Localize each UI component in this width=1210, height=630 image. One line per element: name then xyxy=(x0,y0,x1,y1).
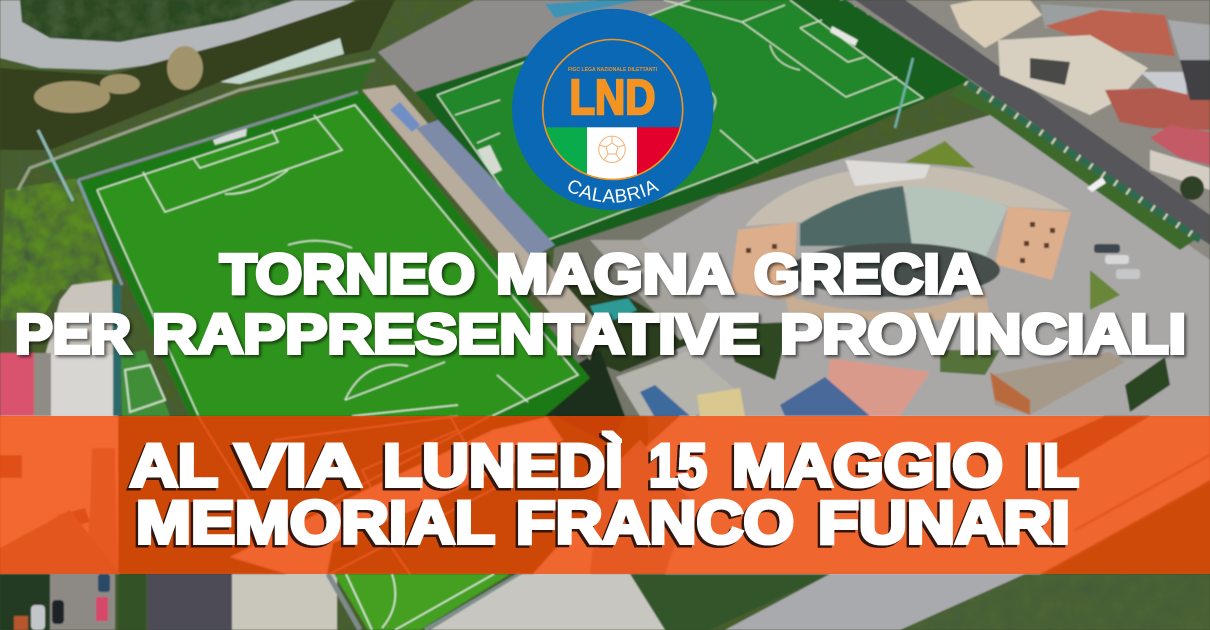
band line 2: FUNARI xyxy=(818,489,1070,556)
fence: posts xyxy=(840,0,1200,240)
playing surface xyxy=(97,105,578,416)
office: left tower xyxy=(730,222,797,300)
logo: LND Calabria xyxy=(512,8,714,210)
court: frame xyxy=(125,365,165,412)
road: top-left curve xyxy=(0,0,355,70)
banner: painted wall xyxy=(220,38,344,84)
band line 1: 15 xyxy=(649,432,707,499)
wall: speckled xyxy=(34,353,51,417)
strip: teal xyxy=(113,285,121,420)
band headline xyxy=(130,432,1079,556)
title xyxy=(15,242,1186,365)
buildings: top-right block xyxy=(950,0,1210,200)
fence xyxy=(328,574,360,630)
teal roof xyxy=(590,298,637,326)
band line 1: IL xyxy=(1026,432,1079,499)
band line 2: MEMORIAL xyxy=(136,489,494,556)
turf xyxy=(415,0,970,250)
vegetation mid xyxy=(630,574,830,630)
left buildings xyxy=(0,280,170,420)
building: lower right xyxy=(990,352,1125,415)
building under band xyxy=(533,416,1210,574)
dark planting xyxy=(555,280,700,372)
parking: top centre xyxy=(378,0,700,92)
cars xyxy=(14,616,28,630)
title line 2: PROVINCIALI xyxy=(780,302,1186,365)
salmon diagonal strip xyxy=(230,417,563,574)
dark roof xyxy=(147,574,232,630)
stand: seats xyxy=(390,102,420,132)
pale rooftops xyxy=(0,416,118,574)
trees below corner xyxy=(545,350,625,416)
ground: centre below right pitch xyxy=(540,190,720,416)
stand: concrete xyxy=(362,85,600,360)
lawns: under office xyxy=(722,322,790,380)
logo disc xyxy=(512,9,713,210)
left pitch xyxy=(80,92,590,416)
parking: right forecourt xyxy=(640,113,1210,420)
car: white xyxy=(1087,177,1106,192)
office: lower curved hall xyxy=(790,243,1000,297)
car park xyxy=(50,574,115,630)
centre yard: teal roof and trees xyxy=(545,240,720,416)
roof: white xyxy=(51,355,113,417)
trees xyxy=(0,574,62,630)
band line 1: VIA xyxy=(235,432,360,499)
office: base xyxy=(785,290,990,320)
verge: green strip xyxy=(950,78,1195,250)
stand: roof xyxy=(416,120,555,258)
right pitch xyxy=(415,0,970,250)
floodlight xyxy=(895,58,913,128)
court: solar blue xyxy=(780,377,870,416)
fence: left side xyxy=(78,180,122,285)
orange ring xyxy=(543,40,683,180)
band line 1: AL xyxy=(130,432,217,499)
building strip xyxy=(1040,416,1150,470)
orange band xyxy=(0,416,1210,574)
corner markings xyxy=(346,574,494,630)
court: small pitch xyxy=(121,350,170,416)
hedge xyxy=(118,574,146,630)
island: planted roundabout xyxy=(20,0,295,42)
road lower xyxy=(725,574,1025,630)
Calabria wordmark: CALABRIA xyxy=(568,180,660,203)
building: low roof xyxy=(616,350,738,416)
wall: dark edge xyxy=(85,448,118,574)
bottom strip xyxy=(0,574,1210,630)
cars: parked xyxy=(1094,244,1140,279)
dark details xyxy=(590,440,690,574)
dark wedge xyxy=(1045,483,1210,574)
concrete yard xyxy=(232,574,337,630)
band line 1: LUNEDÌ xyxy=(383,432,623,499)
fence: top of left pitch xyxy=(78,92,358,180)
office: roof crescent xyxy=(745,165,1070,226)
federation line: FIGC LEGA NAZIONALE DILETTANTI xyxy=(568,67,658,73)
goal xyxy=(213,127,247,145)
under-band area xyxy=(0,416,1210,574)
strip: green between fences xyxy=(40,58,375,180)
band line 1: MAGGIO xyxy=(732,432,1003,499)
pitch markings xyxy=(97,105,578,416)
hedge: dark band under road xyxy=(0,0,395,150)
corner pitch green xyxy=(334,574,510,630)
roof: pink xyxy=(0,353,34,417)
floodlight: left xyxy=(38,130,73,201)
office: dark glass xyxy=(800,186,912,246)
rooftop plant xyxy=(845,160,930,186)
pitch lines under band xyxy=(198,416,530,574)
goal xyxy=(830,26,858,46)
title line 2: PER xyxy=(15,302,131,365)
office: light glass xyxy=(905,186,1008,258)
title line 1: MAGNA xyxy=(496,242,732,305)
fence: corner xyxy=(425,574,520,630)
turf surround xyxy=(80,92,590,416)
wall: dark roof patch xyxy=(0,455,90,530)
path: concrete top fence xyxy=(18,60,375,190)
court: pink paving xyxy=(825,358,930,416)
structure: blue roof xyxy=(545,0,640,18)
playing surface xyxy=(437,0,923,243)
shrubs: dry bushes xyxy=(34,46,203,113)
dark ground under pitch xyxy=(118,416,648,574)
goal: near xyxy=(477,145,502,175)
title line 1: TORNEO xyxy=(220,242,475,305)
title line 2: RAPPRESENTATIVE xyxy=(152,302,760,365)
moss: left field xyxy=(0,178,115,320)
roof: pale xyxy=(45,280,113,356)
pitch markings xyxy=(437,0,923,243)
vegetation right xyxy=(905,574,1210,630)
flag xyxy=(546,127,680,179)
title line 1: GRECIA xyxy=(754,242,982,305)
road stripes xyxy=(1075,455,1210,530)
buildings: top-right ground xyxy=(840,0,1210,260)
lawn: forecourt triangle xyxy=(905,141,975,168)
road: right diagonal xyxy=(855,0,1210,245)
lower-left low wall xyxy=(0,510,120,574)
office: tower windows xyxy=(746,222,1055,263)
football icon xyxy=(599,136,625,162)
band line 2: FRANCO xyxy=(516,489,794,556)
vegetation: lower right xyxy=(1125,357,1170,412)
concrete right xyxy=(430,574,680,630)
LND wordmark: LND xyxy=(570,71,656,125)
path: concrete xyxy=(590,240,720,340)
office: right tower xyxy=(995,207,1071,280)
